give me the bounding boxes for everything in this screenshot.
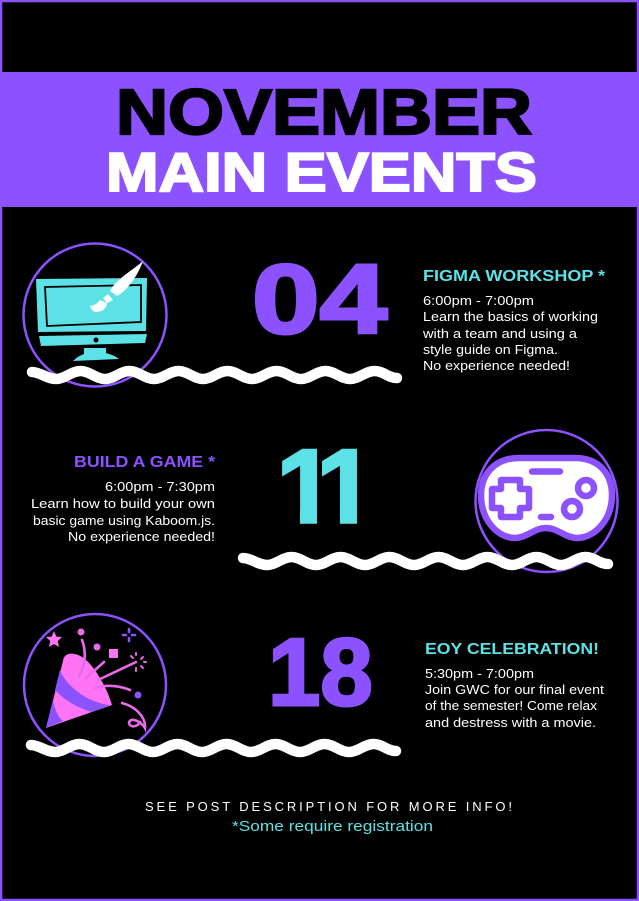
icon: party popper xyxy=(24,614,166,756)
event 1 details: 6:00pm - 7:00pm xyxy=(423,293,534,308)
event 2 details xyxy=(31,479,215,544)
event 2 details: 6:00pm - 7:30pm xyxy=(105,479,215,494)
wavy divider 3 xyxy=(31,744,396,752)
event 3 details: Join GWC for our final event xyxy=(425,682,604,697)
footer note xyxy=(145,799,512,835)
event 1 details: Learn the basics of working xyxy=(423,309,598,324)
footer line: registration: *Some require registration xyxy=(232,819,433,835)
number 18: 18 xyxy=(268,619,373,726)
icon: game controller xyxy=(476,430,618,572)
number 11: 11 xyxy=(276,427,377,544)
event 2: Build a game xyxy=(31,427,618,572)
title line: November: NOVEMBER xyxy=(116,76,532,148)
wavy divider 1 xyxy=(32,371,397,379)
wavy divider 2 xyxy=(243,557,608,565)
event 1: Figma workshop xyxy=(24,244,606,386)
event 2 details: No experience needed! xyxy=(68,529,215,544)
event 1 details: with a team and using a xyxy=(422,326,578,341)
heading: Figma workshop: FIGMA WORKSHOP * xyxy=(423,268,606,285)
event 3 details: 5:30pm - 7:00pm xyxy=(425,666,534,681)
event 2 details: basic game using Kaboom.js. xyxy=(33,513,215,528)
number 04: 04 xyxy=(252,245,387,354)
event 3 details: of the semester! Come relax xyxy=(425,698,598,713)
event 3: EOY celebration xyxy=(24,614,604,756)
event 1 details xyxy=(422,293,598,373)
event 1 details: style guide on Figma. xyxy=(423,342,558,357)
event 2 details: Learn how to build your own xyxy=(31,496,215,511)
event 1 details: No experience needed! xyxy=(423,358,570,373)
heading: EOY celebration: EOY CELEBRATION! xyxy=(425,641,599,658)
icon: monitor with paintbrush xyxy=(24,244,166,386)
footer line: more info: SEE POST DESCRIPTION FOR MORE INFO! xyxy=(145,799,512,814)
event 3 details xyxy=(425,666,604,730)
event 3 details: and destress with a movie. xyxy=(425,715,596,730)
heading: Build a game: BUILD A GAME * xyxy=(74,454,216,471)
title banner xyxy=(0,72,639,207)
title line: Main Events: MAIN EVENTS xyxy=(106,141,537,203)
